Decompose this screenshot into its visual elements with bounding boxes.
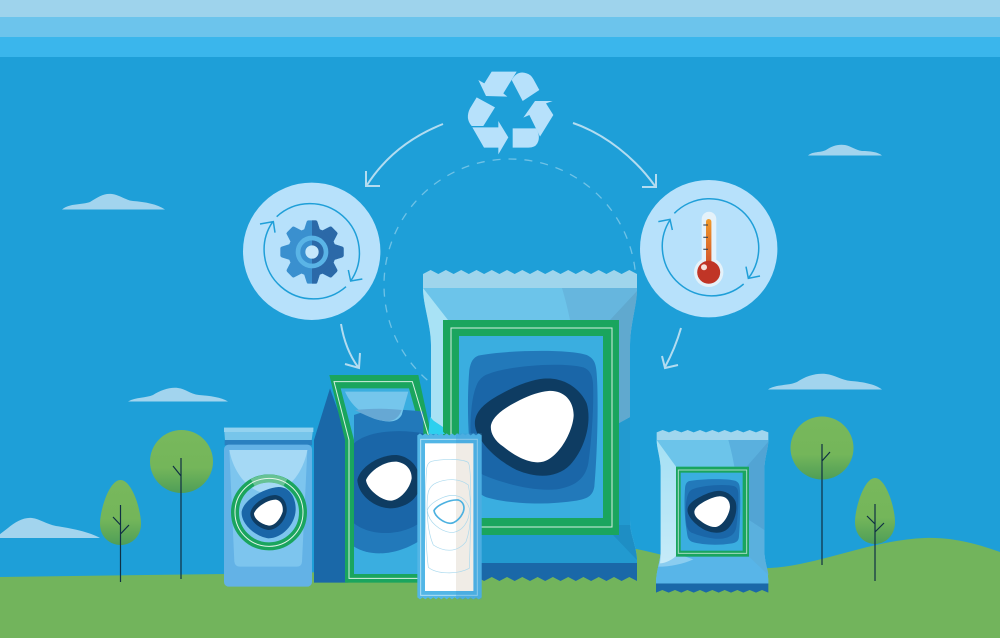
large snack bag [423, 270, 637, 581]
carton top highlight [345, 392, 408, 421]
tree: round right [790, 416, 854, 565]
gear body [280, 220, 344, 284]
sachet outline logo [425, 459, 471, 573]
small bag bottom seal [656, 582, 768, 593]
icon: recycling symbol [468, 72, 553, 154]
arrow: gear to packaging [341, 324, 360, 368]
carton white line [334, 382, 428, 578]
sachet white panel [425, 443, 473, 591]
carton green frame [329, 375, 432, 583]
icon: gear in circle [243, 183, 380, 320]
arrow: recycling to gear [366, 124, 443, 186]
carton window [341, 388, 423, 574]
bag logo blob [468, 351, 598, 504]
pouch logo ring [235, 478, 303, 546]
tree: oval left [100, 480, 141, 582]
carton logo blob [354, 409, 423, 553]
bag top seal [423, 270, 637, 288]
small bag green frame [676, 467, 749, 557]
pouch package [224, 428, 313, 587]
sachet package [417, 433, 482, 599]
small bag body [656, 440, 768, 583]
small bag top seal [657, 430, 768, 440]
bag green frame [443, 320, 619, 535]
tree: oval right [855, 478, 895, 581]
small snack bag right [656, 430, 768, 593]
small bag logo blob [685, 479, 740, 545]
dashed cycle circle [384, 159, 636, 411]
icon: thermometer in circle [640, 180, 777, 317]
pouch body [224, 445, 312, 587]
cyan highlight [428, 417, 445, 434]
carton package [314, 375, 445, 583]
arrow: recycling to thermometer [573, 123, 656, 187]
bag bottom seal [423, 560, 637, 581]
arrow: thermometer to packaging [662, 328, 681, 368]
tree: round left [150, 430, 213, 579]
bag body [423, 288, 637, 563]
pouch logo blob [242, 487, 296, 538]
carton side panel [314, 388, 348, 583]
sachet body [417, 433, 482, 599]
clouds [0, 145, 882, 538]
pouch top seal [224, 428, 313, 440]
ground: green hills [0, 538, 1000, 638]
